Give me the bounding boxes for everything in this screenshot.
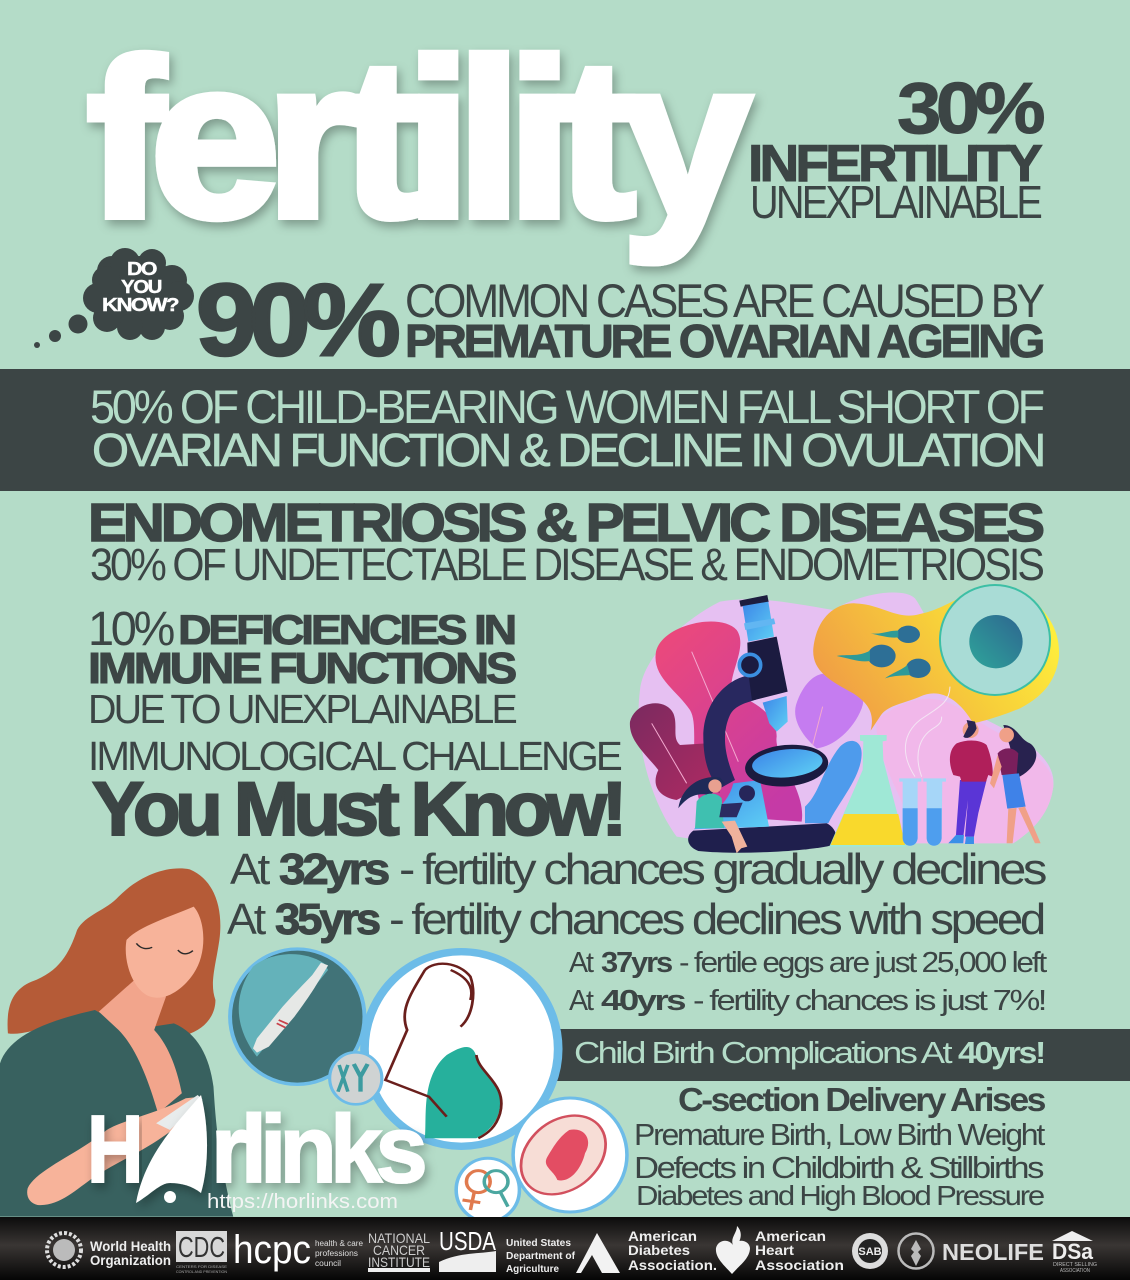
lilac background blob: [639, 592, 1054, 843]
logo: HCPC: health & care: [315, 1239, 364, 1248]
text block: complications list: Defects in Childbirth & Stillbirths: [634, 1150, 1044, 1185]
panel: dark ovarian function band: [0, 369, 1130, 491]
logo: USDA: Department of: [506, 1251, 576, 1262]
microscope arm: [703, 675, 757, 788]
flask: [829, 735, 906, 847]
logo: USDA: [439, 1226, 576, 1275]
logo: horlinks: rlinks: [211, 1096, 424, 1203]
focus knob: [739, 654, 761, 676]
microscope body: [747, 637, 788, 701]
logo: SAB seal: SAB: [858, 1246, 882, 1258]
stat: 30% infertility unexplainable: [748, 69, 1044, 228]
logo: horlinks: [87, 1095, 424, 1213]
text block: complications list: C-section Delivery Arises: [678, 1081, 1045, 1118]
text block: age facts: At: [569, 985, 594, 1017]
stat: 90% premature ovarian ageing: [196, 263, 1045, 377]
logo: DSA: ASSOCIATION: [1060, 1268, 1090, 1274]
blue leaf: [805, 741, 862, 823]
logo: SAB seal: [852, 1233, 888, 1269]
vapour: [905, 687, 950, 777]
nucleus: [969, 615, 1023, 668]
logo: National Cancer Institute: [368, 1230, 430, 1272]
logo: NeoLife wheat and wordmark: NEOLIFE: [942, 1239, 1044, 1265]
panel: dark ovarian function band: 50% OF CHILD-BEARING WOMEN FALL SHORT OF: [90, 380, 1043, 433]
text block: endometriosis: ENDOMETRIOSIS & PELVIC DISEASES: [88, 493, 1043, 553]
logo: American Heart Association: Heart: [755, 1242, 794, 1258]
icon: gender symbols circle: [456, 1158, 519, 1222]
text block: complications list: [634, 1081, 1046, 1211]
text block: age facts: - fertility chances declines with speed: [389, 895, 1044, 944]
egg cell: [940, 585, 1050, 695]
icon: chromosomes circle: [330, 1052, 382, 1104]
logo: HCPC: council: [315, 1259, 341, 1268]
text block: age facts: - fertility chances is just 7%!: [693, 985, 1045, 1017]
pink right blob: [876, 699, 1053, 843]
text block: age facts: 35yrs: [275, 895, 380, 944]
text block: age facts: At: [227, 895, 266, 944]
text block: complications list: Diabetes and High Blood Pressure: [636, 1180, 1045, 1211]
logo: American Diabetes Association: Diabetes: [628, 1242, 690, 1258]
logo: DSA: DIRECT SELLING: [1053, 1262, 1097, 1268]
logo: American Heart Association: American: [755, 1228, 826, 1244]
logo: National Cancer Institute: CANCER: [373, 1242, 425, 1258]
stat: 30% infertility unexplainable: 30%: [897, 69, 1044, 149]
callout: do you know thought cloud: KNOW?: [102, 295, 178, 315]
text block: immune functions: DUE TO UNEXPLAINABLE: [88, 686, 516, 732]
panel: child birth complications band: 40yrs!: [958, 1035, 1044, 1070]
test tubes: [899, 778, 946, 846]
text block: age facts: - fertility chances gradually declines: [399, 845, 1046, 894]
logo: WHO: [47, 1233, 171, 1268]
text block: age facts: 37yrs: [601, 947, 672, 979]
test stick: [156, 1095, 202, 1130]
logo: HCPC: hcpc: [233, 1228, 311, 1272]
sperm cells: [837, 626, 931, 678]
heading: you must know: You Must Know!: [92, 767, 622, 852]
objective lens: [763, 696, 788, 732]
stat: 30% infertility unexplainable: INFERTILITY: [748, 135, 1042, 193]
text block: age facts: - fertile eggs are just 25,000 left: [679, 947, 1047, 979]
logo: DSA: DSa: [1052, 1239, 1094, 1264]
text block: immune functions: IMMUNE FUNCTIONS: [88, 644, 516, 693]
footer: partner logos: [0, 1217, 1130, 1280]
text block: age facts: [227, 845, 1047, 1017]
text block: immune functions: IMMUNOLOGICAL CHALLENGE: [88, 733, 621, 779]
closed eyes: [136, 943, 193, 954]
logo: American Heart Association: Association: [755, 1257, 844, 1273]
icon: pregnant silhouette circle: [364, 952, 558, 1146]
purple leaf: [795, 674, 863, 748]
logo: National Cancer Institute: INSTITUTE: [368, 1254, 430, 1270]
text block: complications list: Premature Birth, Low Birth Weight: [634, 1117, 1046, 1152]
illustration: sad woman with test: [0, 868, 233, 1217]
microscope eyepiece: [739, 595, 775, 642]
text block: endometriosis: 30% OF UNDETECTABLE DISEASE & ENDOMETRIOSIS: [90, 539, 1043, 590]
woman: [990, 725, 1041, 843]
man: [948, 720, 993, 844]
logo: American Heart Association: [716, 1226, 844, 1274]
logo: National Cancer Institute: NATIONAL: [368, 1230, 430, 1246]
logo: WHO: Organization: [90, 1252, 171, 1268]
logo: CDC: CENTERS FOR DISEASE: [176, 1264, 227, 1269]
logo: DSA: [1052, 1231, 1097, 1274]
microscope base: [688, 823, 836, 853]
logo: HCPC: professions: [315, 1249, 358, 1258]
text block: age facts: At: [230, 845, 270, 894]
hair: [8, 868, 220, 1035]
stat: 90% premature ovarian ageing: PREMATURE OVARIAN AGEING: [405, 315, 1042, 367]
seated scientist: [678, 777, 747, 853]
panel: dark ovarian function band: OVARIAN FUNCTION & DECLINE IN OVULATION: [92, 424, 1043, 476]
callout: do you know thought cloud: YOU: [121, 277, 161, 297]
text block: age facts: At: [569, 947, 594, 979]
logo: NeoLife wheat and wordmark: [898, 1234, 1044, 1268]
stat: 30% infertility unexplainable: UNEXPLAINABLE: [750, 176, 1041, 228]
panel: child birth complications band: Child Birth Complications At: [574, 1035, 953, 1070]
logo: USDA: USDA: [439, 1226, 497, 1256]
leaf veins: [652, 652, 823, 783]
callout: do you know thought cloud: DO: [127, 259, 157, 279]
arm: [27, 1097, 202, 1205]
text block: immune functions: [88, 603, 621, 779]
coat: [0, 1010, 233, 1217]
logo: CDC: [176, 1231, 227, 1274]
face: [126, 907, 203, 998]
text block: immune functions: 10%: [88, 603, 174, 656]
logo: USDA: Agriculture: [506, 1264, 559, 1275]
microscope stage: [743, 741, 830, 790]
stat: 90% premature ovarian ageing: 90%: [196, 263, 398, 377]
microscope pillar: [694, 780, 769, 829]
icon: pregnancy test circle: [230, 949, 364, 1084]
logo: CDC: CONTROL AND PREVENTION: [176, 1269, 227, 1274]
logo: WHO: World Health: [90, 1238, 171, 1254]
logo: American Diabetes Association: American: [628, 1228, 697, 1244]
logo: American Diabetes Association: Association.: [628, 1257, 717, 1273]
text block: age facts: 40yrs: [601, 985, 685, 1017]
text block: endometriosis: [88, 493, 1043, 590]
magenta leaf: [655, 622, 802, 822]
text block: age facts: 32yrs: [279, 845, 389, 894]
yellow speech bubble: [813, 592, 1059, 731]
icon: fetus circle: [504, 1098, 627, 1212]
logo: HCPC: [233, 1228, 364, 1272]
maroon leaf: [630, 703, 720, 800]
text block: immune functions: DEFICIENCIES IN: [178, 606, 515, 653]
title: fertility: fertility: [87, 14, 750, 264]
logo: horlinks: H: [87, 1096, 138, 1203]
neck and chest: [99, 980, 182, 1113]
logo: CDC: CDC: [178, 1232, 225, 1264]
illustration: microscope and couple: [630, 585, 1059, 853]
callout: do you know thought cloud: [34, 248, 194, 348]
stat: 90% premature ovarian ageing: COMMON CASES ARE CAUSED BY: [405, 274, 1045, 327]
logo: USDA: United States: [506, 1238, 571, 1249]
panel: child birth complications band: [555, 1029, 1130, 1081]
logo: American Diabetes Association: [576, 1228, 717, 1273]
logo: horlinks: https://horlinks.com: [207, 1191, 398, 1213]
